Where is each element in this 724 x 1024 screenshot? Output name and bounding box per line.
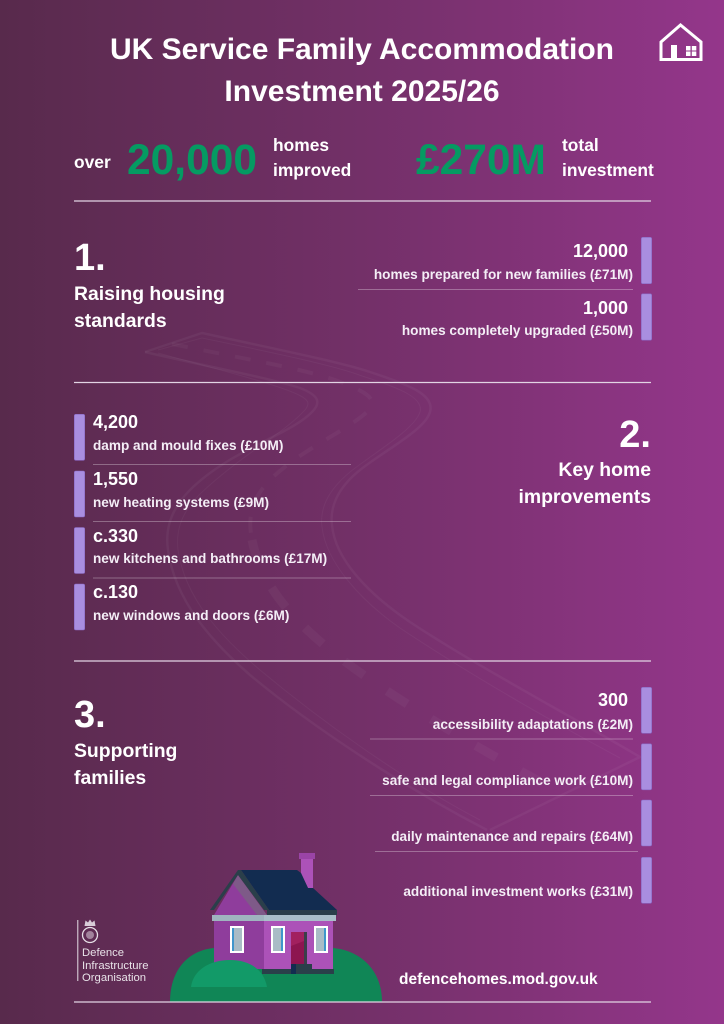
row: damp and mould (74, 412, 283, 460)
row: kitchens and bathrooms (74, 526, 327, 574)
headline stat: total investment: total (562, 135, 599, 155)
headline stat: homes improved: over (74, 152, 111, 172)
section 2 heading: 2. (619, 414, 651, 456)
section 3 heading: Supporting (74, 740, 177, 762)
headline stat: homes improved: homes (273, 135, 329, 155)
row: heating: new heating systems (£9M) (93, 495, 269, 510)
row: windows and doors (74, 582, 289, 630)
row: maintenance (391, 800, 652, 846)
headline stat: homes improved (74, 135, 351, 184)
headline stat: total investment: investment (562, 160, 654, 180)
headline stat: total investment (416, 135, 654, 184)
headline stat: homes improved: improved (273, 160, 351, 180)
logo: Defence Infrastructure Organisation: Organisation (82, 972, 146, 984)
row: kitchens and bathrooms: new kitchens and bathrooms (£17M) (93, 551, 327, 566)
row: homes prepared (374, 237, 652, 284)
row: additional works (403, 857, 652, 903)
row: homes prepared: 12,000 (573, 241, 628, 261)
section 1 heading: 1. (74, 237, 106, 279)
section 1 heading: standards (74, 310, 167, 332)
website address: defencehomes.mod.gov.uk (399, 971, 598, 988)
headline stat: total investment: £270M (416, 137, 546, 184)
row: accessibility: 300 (598, 690, 628, 710)
panel: supporting families (74, 687, 652, 903)
row: homes upgraded: homes completely upgraded (£50M) (402, 323, 633, 338)
headline stat: homes improved: 20,000 (127, 137, 257, 184)
title (110, 33, 614, 108)
section 1 heading: Raising housing (74, 283, 225, 305)
row: homes prepared: homes prepared for new families (£71M) (374, 267, 633, 282)
row: accessibility (433, 687, 652, 733)
row: kitchens and bathrooms: c.330 (93, 526, 138, 546)
title: Investment 2025/26 (224, 75, 500, 108)
row: homes upgraded: 1,000 (583, 298, 628, 318)
section 3 heading: 3. (74, 694, 106, 736)
row: maintenance: daily maintenance and repairs (£64M) (391, 829, 633, 844)
row: windows and doors: c.130 (93, 582, 138, 602)
section 3 heading: families (74, 767, 146, 789)
section 3 heading (74, 694, 177, 789)
panel: key home improvements (74, 412, 651, 630)
row: compliance (382, 744, 652, 790)
row: damp and mould: 4,200 (93, 412, 138, 432)
section 1 heading (74, 237, 225, 332)
row: heating (74, 469, 269, 517)
section 2 heading: improvements (518, 486, 651, 508)
background road illustration (145, 333, 640, 830)
panel: raising housing standards (74, 237, 652, 340)
logo: Defence Infrastructure Organisation: Defence (82, 947, 124, 959)
row: accessibility: accessibility adaptations (£2M) (433, 717, 633, 732)
row: homes upgraded (402, 294, 652, 340)
icon: house outline (661, 25, 701, 60)
row: compliance: safe and legal compliance work (£10M) (382, 773, 633, 788)
section 2 heading: Key home (558, 459, 651, 481)
row: damp and mould: damp and mould fixes (£10M) (93, 438, 283, 453)
section 2 heading (518, 414, 651, 508)
row: heating: 1,550 (93, 469, 138, 489)
row: additional works: additional investment works (£31M) (403, 884, 633, 899)
illustration: house on hill (170, 853, 382, 1002)
row: windows and doors: new windows and doors (£6M) (93, 608, 289, 623)
title: UK Service Family Accommodation (110, 33, 614, 66)
logo: Defence Infrastructure Organisation: Infrastructure (82, 960, 149, 972)
logo: Defence Infrastructure Organisation (78, 920, 149, 984)
